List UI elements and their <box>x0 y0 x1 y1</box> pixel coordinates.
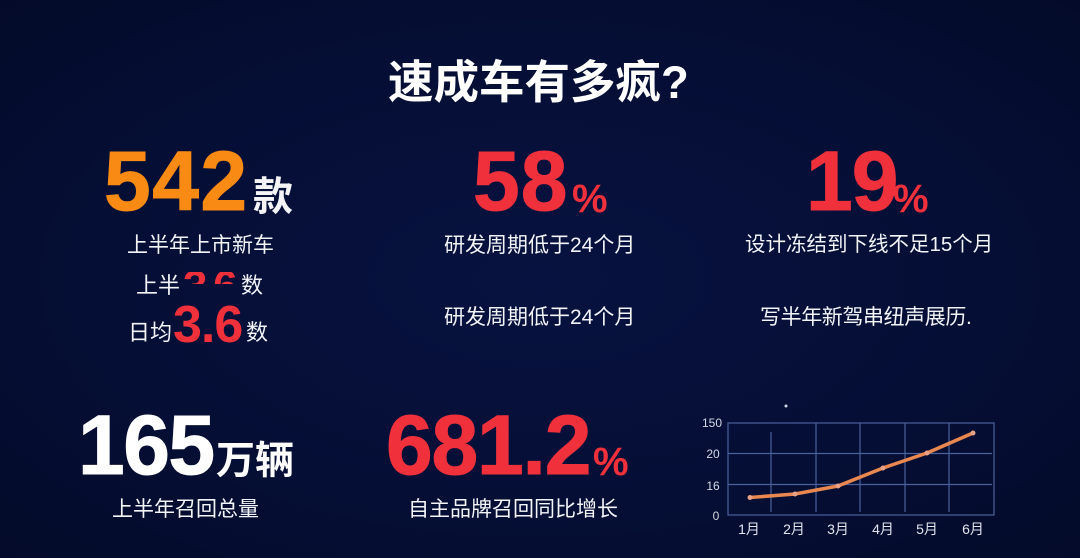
garbled row: clipped figure <box>136 272 263 298</box>
stat: 1.65 million vehicles: 165 <box>78 398 214 492</box>
stat: 681.2%: 681.2 <box>386 398 590 492</box>
label: design freeze under 15 months: 设计冻结到下线不足15个月 <box>745 233 993 256</box>
garbled row: clipped figure: 数 <box>241 273 263 298</box>
data line <box>748 430 976 500</box>
daily average 3.6 <box>128 296 268 354</box>
stat: 1.65 million vehicles: 万辆 <box>216 440 294 483</box>
stat: 542 new models: 款 <box>253 175 293 219</box>
label: domestic brand recall growth: 自主品牌召回同比增长 <box>408 498 618 521</box>
title: 速成车有多疯? <box>388 57 689 108</box>
y axis labels: 150 <box>702 416 722 430</box>
label: distorted text: 写半年新驾串纽声展历. <box>760 306 971 329</box>
daily average 3.6: 数 <box>246 320 268 345</box>
y axis labels: 0 <box>713 509 720 523</box>
x axis labels: 6月 <box>962 521 984 537</box>
stat: 58%: % <box>572 177 608 221</box>
stat: 542 new models: 542 <box>104 134 249 228</box>
faded chart title mark <box>784 404 788 408</box>
label: R&D under 24 months: 研发周期低于24个月 <box>444 234 635 257</box>
x axis labels: 2月 <box>783 521 805 537</box>
stat: 19%: % <box>893 177 929 221</box>
y axis labels: 16 <box>706 479 720 493</box>
stat: 681.2%: % <box>593 440 629 484</box>
stat: 1.65 million vehicles <box>78 398 294 492</box>
x axis labels: 3月 <box>827 521 849 537</box>
x axis labels: 5月 <box>916 521 938 537</box>
daily average 3.6: 3.6 <box>173 296 242 354</box>
chart frame and grid <box>728 423 994 515</box>
label: repeated R&D text: 研发周期低于24个月 <box>444 306 635 329</box>
stat: 19%: 19 <box>806 134 897 228</box>
stat: 58%: 58 <box>473 134 568 228</box>
garbled row: clipped figure: 上半 <box>136 273 180 298</box>
y axis labels: 20 <box>706 447 720 461</box>
x axis labels: 1月 <box>738 521 760 537</box>
y axis labels <box>702 416 722 523</box>
x axis labels <box>738 521 984 537</box>
line chart <box>702 404 995 537</box>
daily average 3.6: 日均 <box>128 320 172 345</box>
label: recalled total: 上半年召回总量 <box>112 498 259 521</box>
x axis labels: 4月 <box>872 521 894 537</box>
label: new models in first half: 上半年上市新车 <box>127 234 274 257</box>
